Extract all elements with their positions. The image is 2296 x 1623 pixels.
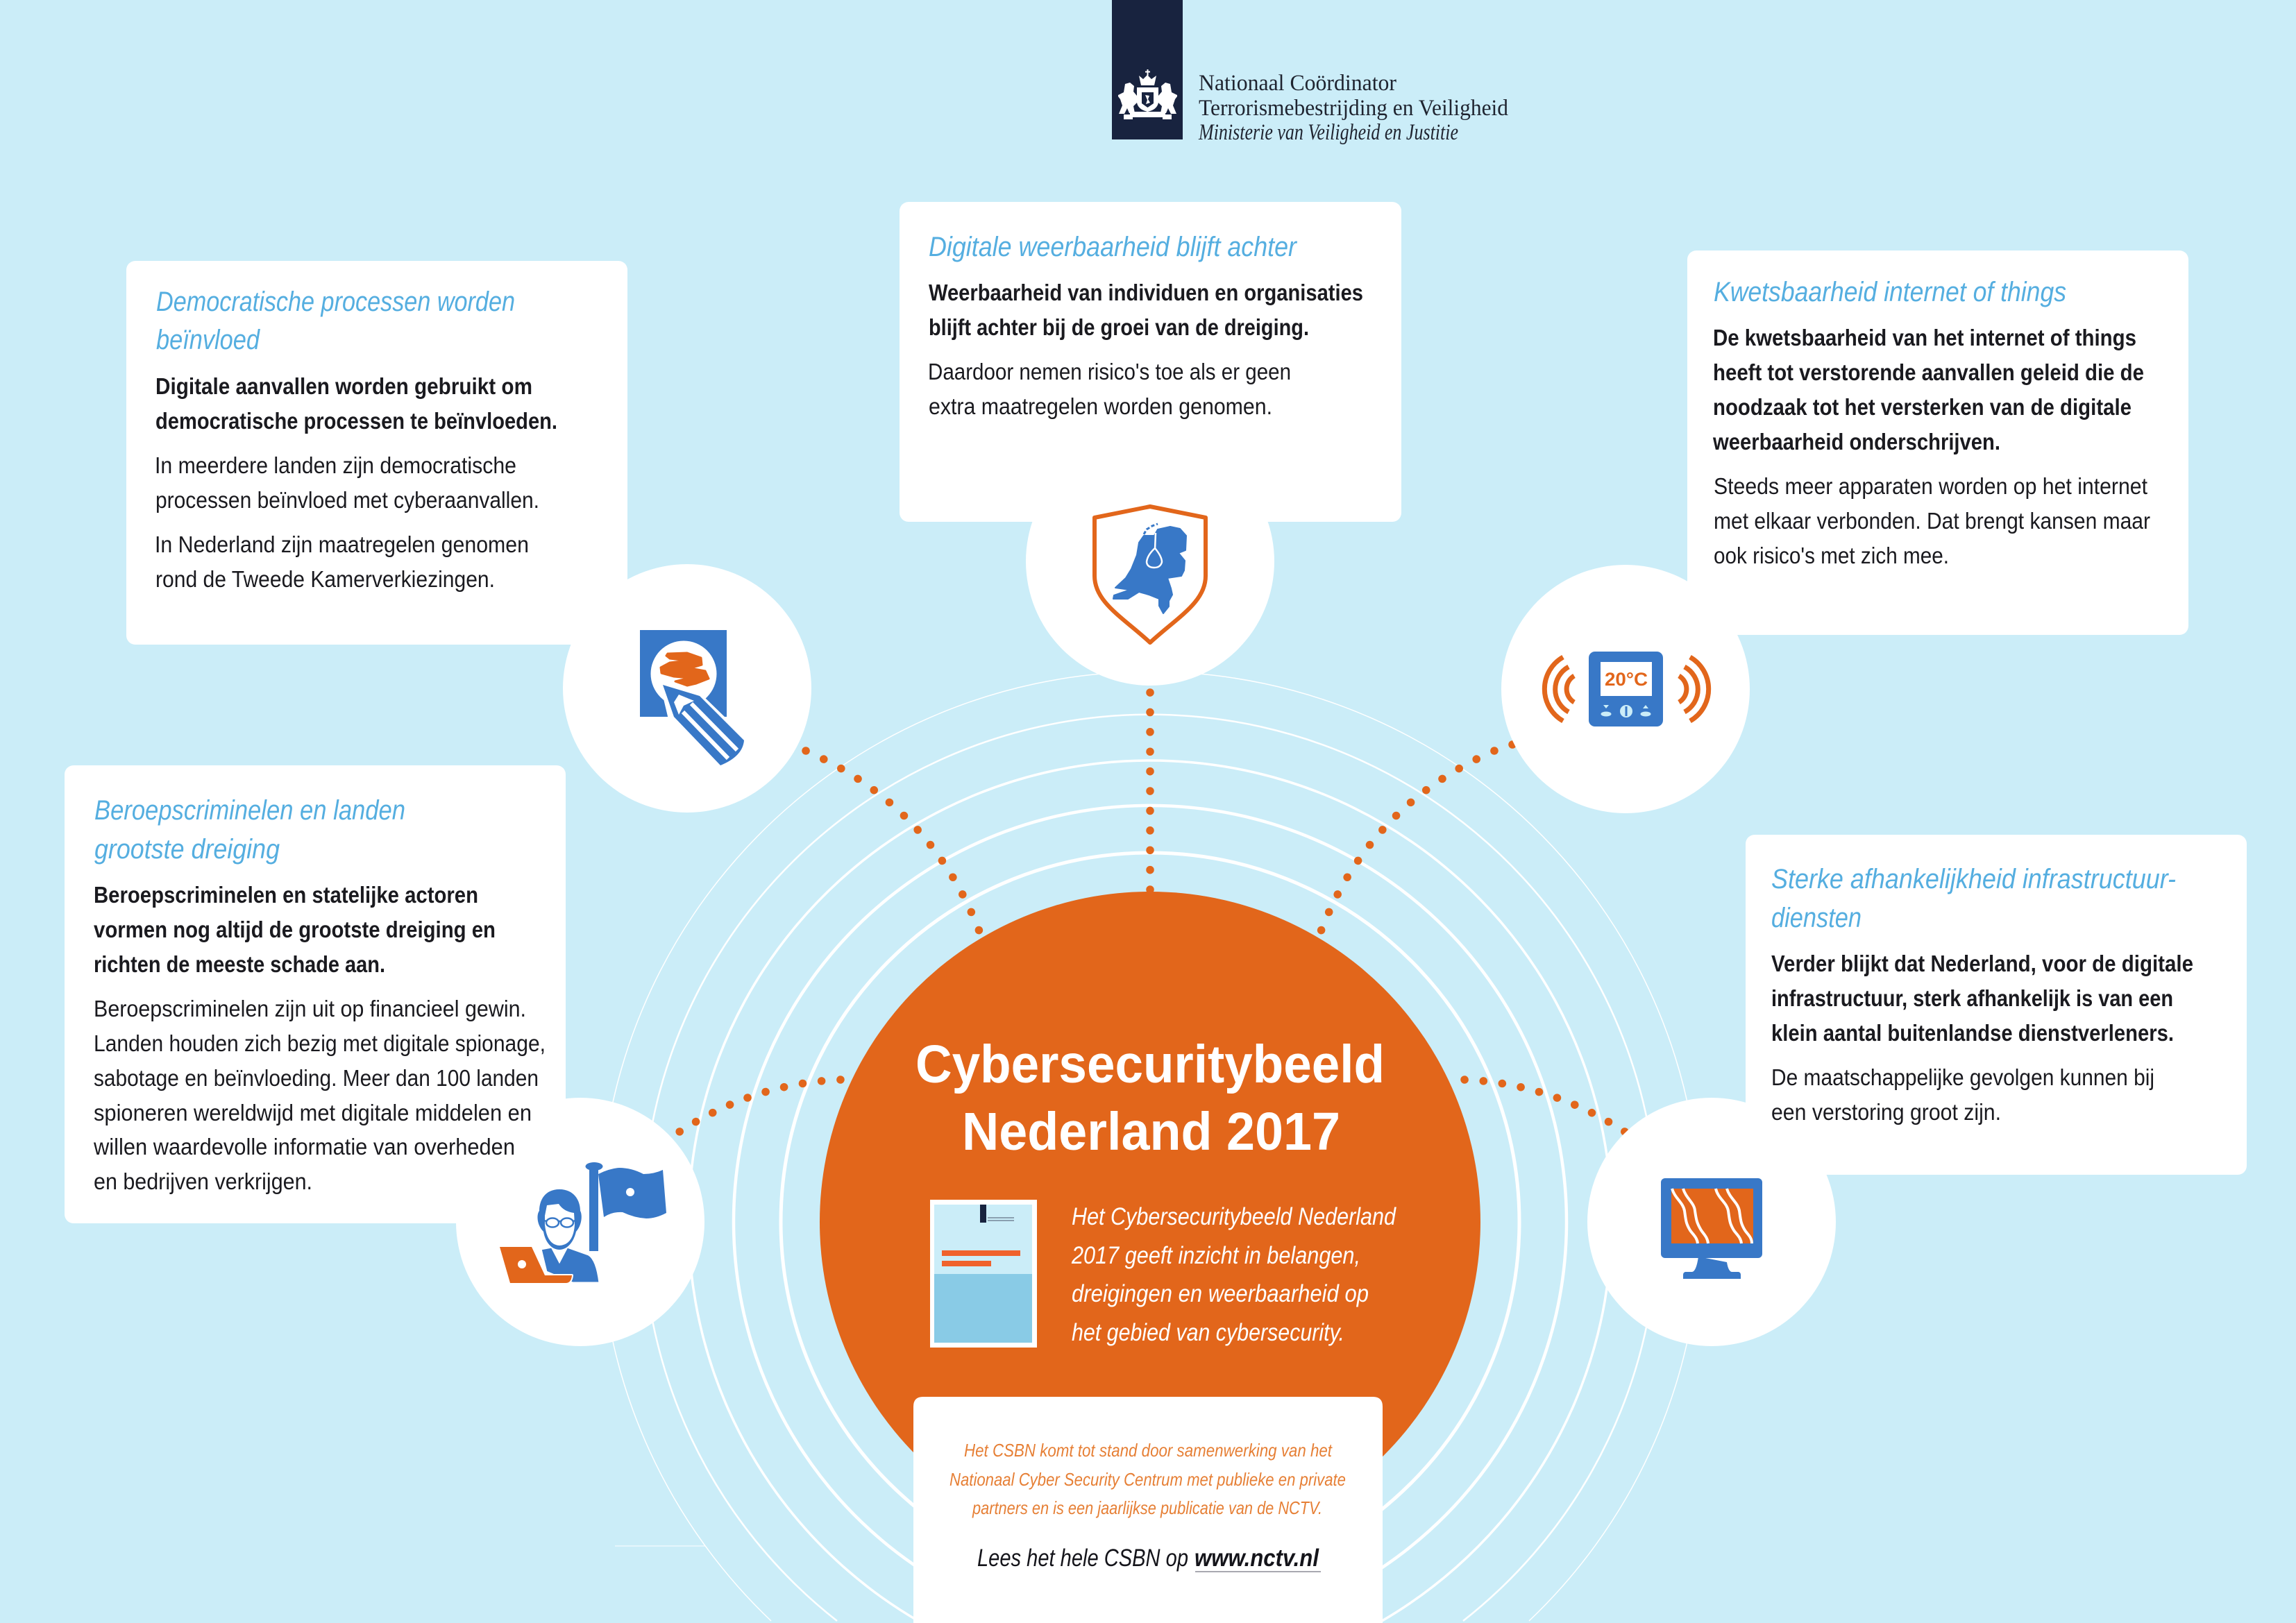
logo block [1112, 0, 1183, 139]
body text: extra maatregelen worden genomen. [929, 393, 1272, 419]
panel: afhankelijkheid infrastructuur [1746, 835, 2247, 1175]
body text: In meerdere landen zijn democratische [155, 452, 516, 478]
heading [94, 795, 405, 865]
icon: report cover [930, 1200, 1037, 1348]
source note: Nationaal Cyber Security Centrum met publieke en private [949, 1469, 1346, 1490]
white icon circles [456, 437, 1836, 1346]
body text [928, 359, 1291, 419]
central orange circle [820, 892, 1480, 1552]
title: Nederland 2017 [962, 1102, 1340, 1162]
icon: person with flag and laptop [500, 1162, 666, 1283]
body text: willen waardevolle informatie van overheden [93, 1134, 515, 1159]
bold intro [929, 280, 1363, 340]
header organisation text: Nationaal Coördinator [1199, 71, 1396, 96]
link line: www.nctv.nl [1195, 1545, 1319, 1572]
heading: Sterke afhankelijkheid infrastructuur- [1771, 864, 2176, 894]
body text: processen beïnvloed met cyberaanvallen. [155, 487, 539, 513]
title: Cybersecuritybeeld [915, 1035, 1385, 1094]
source note: partners en is een jaarlijkse publicatie van de NCTV. [972, 1497, 1322, 1518]
heading: Beroepscriminelen en landen [94, 795, 405, 826]
heading: Digitale weerbaarheid blijft achter [929, 232, 1297, 262]
bold intro [94, 882, 496, 977]
heading: Kwetsbaarheid internet of things [1714, 277, 2066, 307]
source note [949, 1440, 1346, 1518]
header organisation text [1198, 71, 1508, 145]
icon: shield with Netherlands map [1095, 507, 1206, 643]
body text: Beroepscriminelen zijn uit op financieel gewin. [94, 996, 526, 1021]
body text [155, 452, 539, 592]
bold intro: Weerbaarheid van individuen en organisaties [929, 280, 1363, 305]
intro text [1071, 1203, 1396, 1346]
intro text: het gebied van cybersecurity. [1072, 1319, 1344, 1346]
heading: Democratische processen worden [156, 287, 515, 317]
icon: royal coat of arms [1118, 69, 1177, 119]
panel: internet of things [1687, 250, 2188, 635]
heading [156, 287, 515, 355]
panel: democratische processen [126, 261, 627, 645]
body text: ook risico's met zich mee. [1714, 543, 1949, 568]
bold intro [155, 373, 557, 434]
header organisation text: Ministerie van Veiligheid en Justitie [1198, 120, 1458, 145]
concentric rings [600, 672, 1700, 1621]
bold intro: weerbaarheid onderschrijven. [1712, 429, 2000, 454]
bold intro: De kwetsbaarheid van het internet of things [1713, 325, 2136, 350]
bold intro [1771, 951, 2193, 1046]
bold intro: Beroepscriminelen en statelijke actoren [94, 882, 478, 908]
dotted connector lines [679, 692, 1625, 1132]
heading: grootste dreiging [94, 834, 280, 865]
body text: met elkaar verbonden. Dat brengt kansen maar [1714, 508, 2150, 534]
bold intro: democratische processen te beïnvloeden. [155, 408, 557, 434]
icon: smart thermostat [1544, 652, 1709, 726]
intro text: dreigingen en weerbaarheid op [1072, 1280, 1369, 1307]
body text: Daardoor nemen risico's toe als er geen [928, 359, 1291, 384]
header organisation text: Terrorismebestrijding en Veiligheid [1199, 96, 1508, 121]
panel: beroepscriminelen [65, 765, 566, 1223]
bold intro: klein aantal buitenlandse dienstverleners. [1771, 1020, 2174, 1046]
bold intro: noodzaak tot het versterken van de digitale [1713, 394, 2132, 420]
body text: In Nederland zijn maatregelen genomen [155, 532, 529, 557]
body text [93, 996, 546, 1194]
bold intro: vormen nog altijd de grootste dreiging en [94, 917, 496, 942]
body text: rond de Tweede Kamerverkiezingen. [155, 566, 495, 592]
body text: en bedrijven verkrijgen. [94, 1169, 312, 1194]
body text: Landen houden zich bezig met digitale spionage, [94, 1030, 546, 1056]
body text: Steeds meer apparaten worden op het internet [1714, 473, 2147, 499]
bold intro: richten de meeste schade aan. [94, 951, 385, 977]
bold intro: Verder blijkt dat Nederland, voor de digitale [1771, 951, 2193, 976]
title [915, 1035, 1385, 1162]
body text [1714, 473, 2150, 568]
intro text: 2017 geeft inzicht in belangen, [1071, 1242, 1360, 1269]
heading: diensten [1771, 903, 1862, 933]
link line: Lees het hele CSBN op [977, 1545, 1188, 1572]
icon: pencil writing [640, 630, 750, 770]
heading: beïnvloed [156, 325, 260, 355]
bold intro: blijft achter bij de groei van de dreiging. [929, 314, 1309, 340]
body text: een verstoring groot zijn. [1771, 1099, 2001, 1125]
callout: source and link [913, 1397, 1383, 1623]
panel: digitale weerbaarheid [900, 202, 1401, 522]
icon: smart thermostat: 20°C [1605, 669, 1648, 690]
body text: spioneren wereldwijd met digitale middelen en [94, 1100, 532, 1125]
bold intro: infrastructuur, sterk afhankelijk is van een [1771, 985, 2173, 1011]
icon: monitor with waves [1661, 1178, 1762, 1279]
bold intro: heeft tot verstorende aanvallen geleid die de [1713, 359, 2144, 385]
bold intro [1712, 325, 2144, 454]
source note: Het CSBN komt tot stand door samenwerking van het [964, 1440, 1333, 1461]
body text: De maatschappelijke gevolgen kunnen bij [1771, 1064, 2154, 1090]
intro text: Het Cybersecuritybeeld Nederland [1072, 1203, 1396, 1230]
body text: sabotage en beïnvloeding. Meer dan 100 landen [94, 1065, 539, 1091]
heading [1771, 864, 2176, 933]
body text [1771, 1064, 2154, 1125]
bold intro: Digitale aanvallen worden gebruikt om [155, 373, 532, 399]
